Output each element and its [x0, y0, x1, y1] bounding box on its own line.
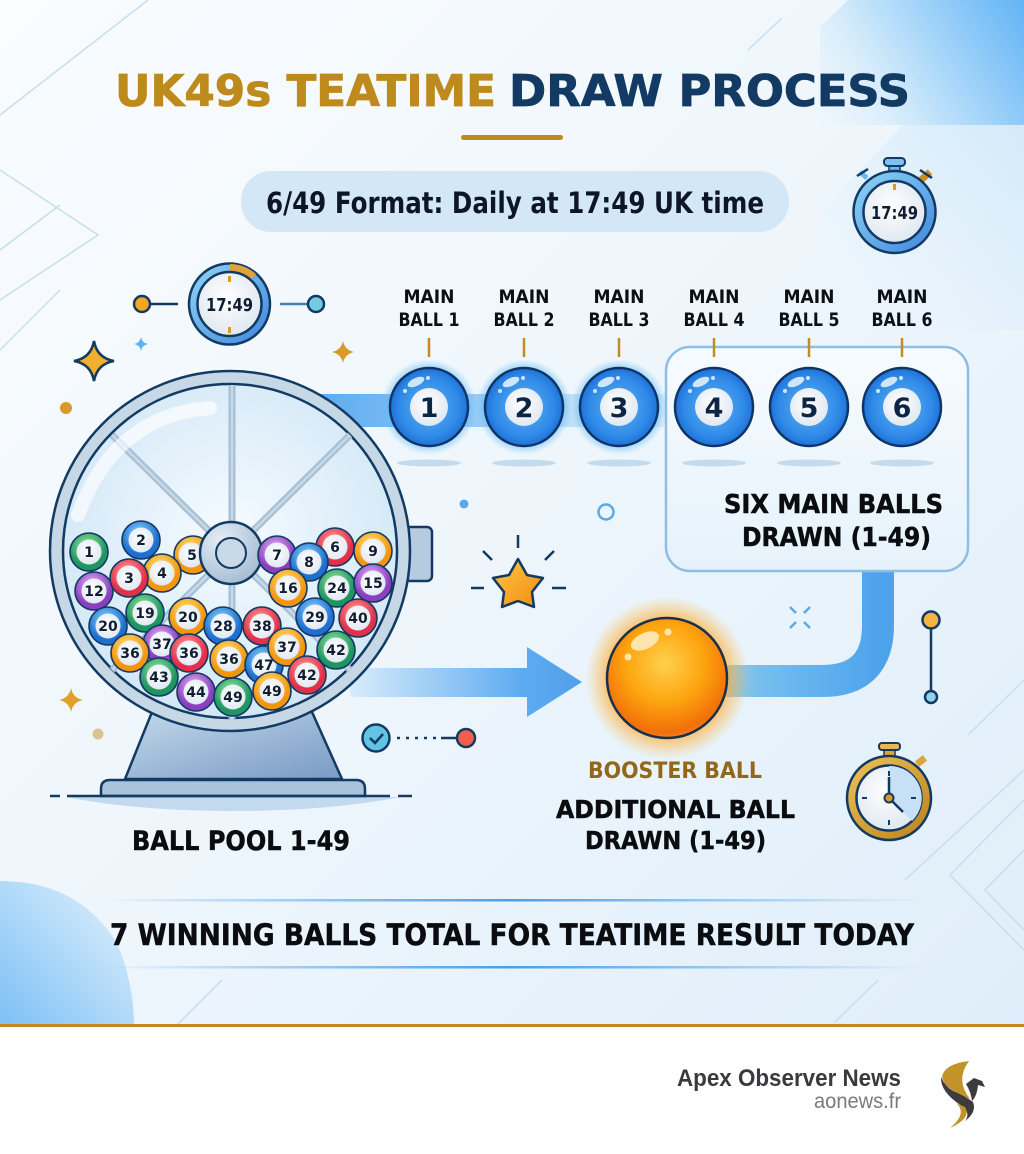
booster ball label — [556, 759, 795, 855]
main ball 1: 1 — [420, 393, 438, 424]
main ball 3: MAIN — [594, 286, 644, 308]
ball pool: 44 — [186, 685, 206, 701]
icon: vertical pin connector — [922, 612, 940, 703]
main ball 6 — [863, 286, 941, 466]
footer brand text: Apex Observer News — [677, 1065, 901, 1092]
ball pool: 38 — [252, 619, 272, 635]
icon: stopwatch top right — [854, 158, 936, 253]
ball pool: 36 — [120, 646, 140, 662]
main balls row — [381, 286, 941, 466]
panel: six main balls — [666, 347, 968, 571]
decorative sparkles — [59, 337, 810, 740]
machine hub — [200, 522, 262, 584]
ball pool: 6 — [330, 540, 340, 556]
ball pool: 36 — [179, 646, 199, 662]
footer brand text: aonews.fr — [814, 1090, 901, 1113]
footer logo — [941, 1061, 985, 1128]
ball pool: 7 — [272, 548, 282, 564]
ball pool label: BALL POOL 1-49 — [132, 826, 350, 857]
ball pool: 9 — [368, 544, 378, 560]
ball pool — [70, 521, 392, 716]
main ball 2: MAIN — [498, 286, 550, 308]
connector from main ball panel to booster ball — [725, 560, 878, 681]
icon: gold stopwatch — [847, 743, 931, 840]
machine side knob — [405, 527, 432, 581]
panel caption: DRAWN (1-49) — [742, 523, 931, 553]
main ball 6: 6 — [893, 393, 911, 424]
ball pool: 12 — [84, 584, 104, 600]
ball pool: 3 — [124, 571, 134, 587]
main ball 2: BALL 2 — [494, 309, 554, 331]
machine drum — [50, 371, 410, 731]
ball pool: 16 — [278, 581, 298, 597]
icon: star with rays — [471, 535, 566, 607]
ball behind hub — [174, 536, 212, 574]
connector band to main balls — [320, 394, 680, 427]
icon: check node with dotted link — [362, 724, 475, 752]
ball pool: 1 — [84, 545, 94, 561]
ball pool: 36 — [219, 652, 239, 668]
lottery machine — [50, 371, 432, 811]
ball pool: 47 — [254, 658, 274, 674]
main ball 4: MAIN — [688, 286, 740, 308]
title — [115, 66, 910, 117]
footer — [0, 1024, 1024, 1154]
ball pool: 43 — [149, 670, 169, 686]
main ball 1 — [381, 286, 477, 466]
main ball 5: BALL 5 — [778, 309, 840, 331]
main ball 4: 4 — [705, 393, 723, 424]
main ball 6: MAIN — [876, 286, 928, 308]
main ball 2: 2 — [515, 393, 533, 424]
machine stand — [50, 712, 412, 811]
format pill: 6/49 Format: Daily at 17:49 UK time — [266, 186, 764, 220]
ball pool: 20 — [178, 610, 198, 626]
ball pool: 4 — [157, 566, 167, 582]
title underline — [461, 135, 563, 140]
summary heading: 7 WINNING BALLS TOTAL FOR TEATIME RESULT TODAY — [110, 918, 915, 952]
title: DRAW PROCESS — [509, 66, 910, 117]
main ball 1: BALL 1 — [398, 309, 460, 331]
summary lines — [100, 899, 920, 968]
title: UK49s TEATIME — [115, 66, 496, 117]
main ball 3: 3 — [610, 393, 628, 424]
main ball 6: BALL 6 — [872, 309, 932, 331]
ball pool: 28 — [213, 619, 233, 635]
panel caption: SIX MAIN BALLS — [724, 490, 943, 520]
ball behind hub: 5 — [187, 548, 197, 564]
icon: clock with connectors: 17:49 — [206, 295, 253, 316]
main ball 2 — [476, 286, 572, 466]
icon: stopwatch top right: 17:49 — [871, 203, 918, 224]
main ball 5 — [770, 286, 848, 466]
booster ball — [585, 596, 749, 760]
main ball 4: BALL 4 — [684, 309, 744, 331]
ball pool: 37 — [152, 637, 172, 653]
arrow to booster ball — [350, 647, 582, 717]
ball pool: 37 — [277, 640, 297, 656]
footer brand text — [677, 1065, 901, 1113]
icon: clock with connectors — [134, 264, 324, 344]
ball pool: 49 — [223, 690, 243, 706]
ball pool: 40 — [348, 611, 368, 627]
booster ball label: ADDITIONAL BALL — [556, 795, 795, 824]
panel caption — [724, 490, 943, 553]
ball pool: 29 — [305, 610, 325, 626]
booster ball label: BOOSTER BALL — [588, 759, 762, 784]
ball pool: 20 — [98, 619, 118, 635]
main ball 3: BALL 3 — [588, 309, 650, 331]
main ball 5: MAIN — [784, 286, 834, 308]
ball pool: 19 — [135, 606, 155, 622]
ball pool: 24 — [327, 581, 347, 597]
main ball 4 — [675, 286, 753, 466]
ball pool: 49 — [262, 684, 282, 700]
main ball 1: MAIN — [404, 286, 454, 308]
main ball 3 — [571, 286, 667, 466]
ball pool: 2 — [136, 533, 146, 549]
ball pool: 15 — [363, 576, 383, 592]
booster ball label: DRAWN (1-49) — [585, 826, 766, 855]
ball pool: 42 — [297, 668, 317, 684]
ball pool: 42 — [326, 643, 346, 659]
main ball 5: 5 — [800, 393, 818, 424]
format pill — [241, 171, 789, 232]
ball pool: 8 — [304, 555, 314, 571]
